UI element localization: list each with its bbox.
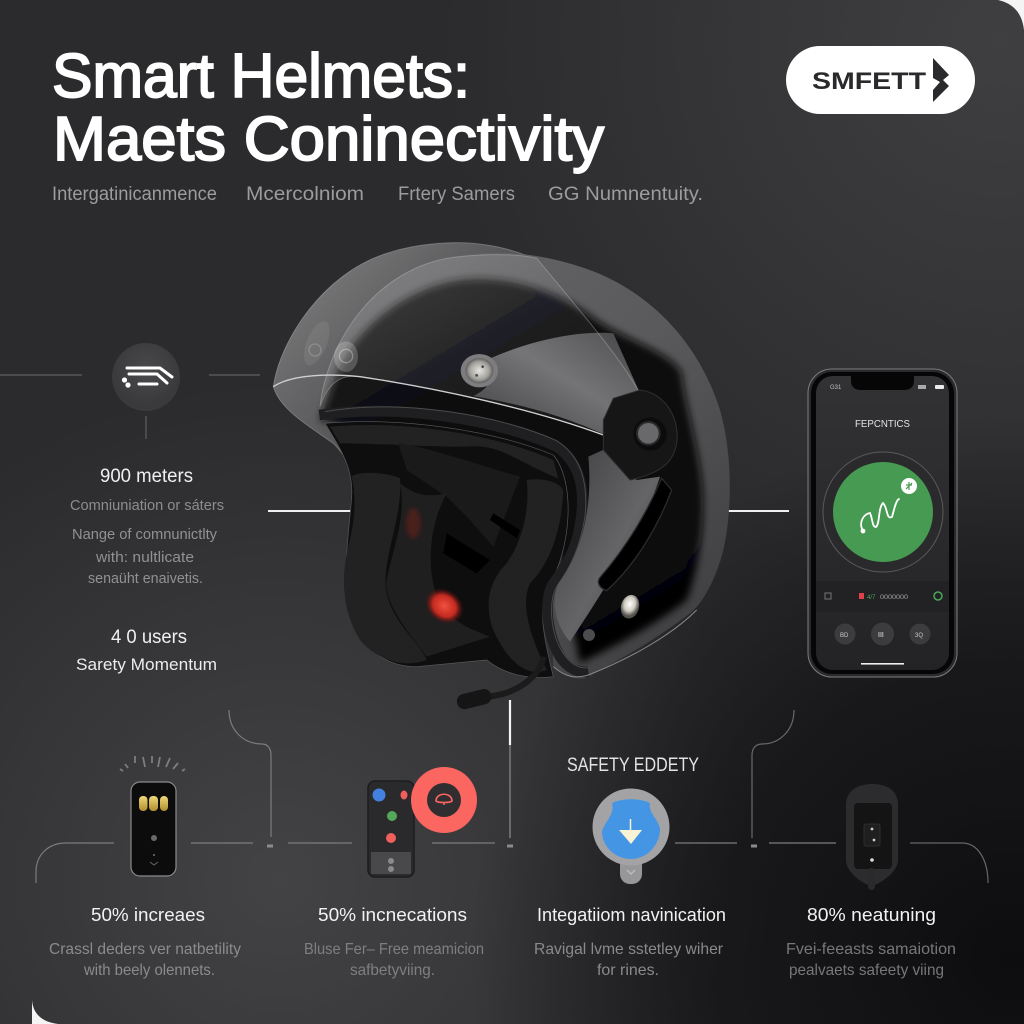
feature column 4: Fvei-feeasts samaiotion bbox=[786, 941, 956, 958]
icon: phone with alert bubble bbox=[368, 767, 477, 877]
left stats text block: senaüht enaivetis. bbox=[88, 570, 203, 587]
subtitle row bbox=[52, 184, 703, 205]
icon: signal range bbox=[112, 343, 180, 411]
silver snap bbox=[618, 593, 642, 621]
feature column 2: Bluse Fer– Free meamicion bbox=[304, 941, 484, 958]
subtitle row: Mcercolniom bbox=[246, 184, 364, 205]
left stats text block bbox=[70, 466, 224, 674]
left stats text block: Comniuniation or sáters bbox=[70, 497, 224, 514]
title: Maets Coninectivity bbox=[53, 105, 604, 174]
logo badge bbox=[786, 46, 975, 114]
front visor bbox=[320, 255, 640, 435]
dome glare bbox=[473, 333, 640, 434]
feature column 4 bbox=[786, 905, 956, 979]
helmet illustration bbox=[273, 243, 730, 711]
app title: FEPCNTICS bbox=[855, 418, 910, 430]
shell dark dome bbox=[320, 279, 703, 663]
feature column 4: 80% neatuning bbox=[807, 905, 936, 925]
phone buttons bbox=[834, 622, 930, 646]
phone buttons: BD bbox=[840, 633, 849, 639]
subtitle row: Frtery Samers bbox=[398, 184, 515, 205]
title bbox=[52, 42, 604, 174]
feature column 1 bbox=[49, 905, 241, 979]
green dial bbox=[823, 452, 943, 572]
phone status bar bbox=[830, 385, 944, 391]
feature column 1: 50% increaes bbox=[91, 905, 205, 925]
feature column 1: Crassl deders ver natbetility bbox=[49, 941, 241, 958]
status band bbox=[816, 581, 949, 612]
right cheek pad bbox=[489, 479, 563, 672]
feature column 2: 50% incnecations bbox=[318, 905, 467, 925]
feature column 4: pealvaets safeety viing bbox=[789, 962, 944, 979]
left stats text block: Nange of comnunictlty bbox=[72, 526, 217, 543]
side plate bbox=[555, 448, 660, 642]
small dot bbox=[583, 629, 595, 641]
phone notch bbox=[851, 376, 914, 390]
left cheek pad bbox=[344, 473, 427, 663]
feature column 3: for rines. bbox=[597, 962, 659, 979]
feature column 1: with beely olennets. bbox=[83, 962, 215, 979]
icon: wearable device with gold indicators bbox=[120, 756, 185, 876]
phone buttons: III bbox=[878, 632, 884, 639]
microphone boom bbox=[455, 657, 543, 711]
subtitle row: Intergatinicanmence bbox=[52, 184, 217, 205]
red glow light bbox=[406, 508, 471, 632]
phone buttons: 3Q bbox=[915, 633, 923, 639]
left stats text block: 900 meters bbox=[100, 466, 193, 487]
title: Smart Helmets: bbox=[52, 42, 470, 111]
logo badge: SMFETT bbox=[812, 68, 926, 95]
phone app mockup bbox=[808, 369, 957, 677]
icon: helmet module bbox=[846, 784, 898, 890]
left stats text block: with: nultlicate bbox=[95, 549, 194, 566]
subtitle row: GG Numnentuity. bbox=[548, 184, 703, 205]
feature column 2 bbox=[304, 905, 484, 979]
vent slot bbox=[598, 478, 672, 591]
inner shell shapes bbox=[386, 443, 520, 657]
feature column 3 bbox=[534, 905, 726, 979]
status band: 0000000 bbox=[880, 595, 909, 601]
icon: navigation shield bbox=[592, 788, 670, 884]
feature column 3: Ravigal lvme sstetley wiher bbox=[534, 941, 724, 958]
shell bottom edge bbox=[553, 610, 697, 677]
side module bbox=[603, 390, 677, 480]
left stats text block: Sarety Momentum bbox=[76, 655, 217, 674]
front rim bbox=[319, 411, 588, 672]
lid button bbox=[461, 354, 498, 387]
connector lines bbox=[0, 375, 988, 883]
visor edge highlight bbox=[273, 375, 603, 435]
visor hinge ghosts bbox=[299, 318, 358, 372]
upper liner padding bbox=[330, 425, 558, 478]
feature column 3: Integatiiom navinication bbox=[537, 905, 726, 925]
left stats text block: 4 0 users bbox=[111, 627, 187, 648]
safety heading: SAFETY EDDETY bbox=[567, 755, 699, 776]
status band: 4/7 bbox=[867, 595, 876, 601]
feature column 2: safbetyviing. bbox=[350, 962, 435, 979]
lining bbox=[325, 422, 568, 678]
helmet shell bbox=[318, 253, 730, 679]
back visor layer bbox=[273, 243, 530, 500]
phone status bar: G31 bbox=[830, 385, 842, 391]
